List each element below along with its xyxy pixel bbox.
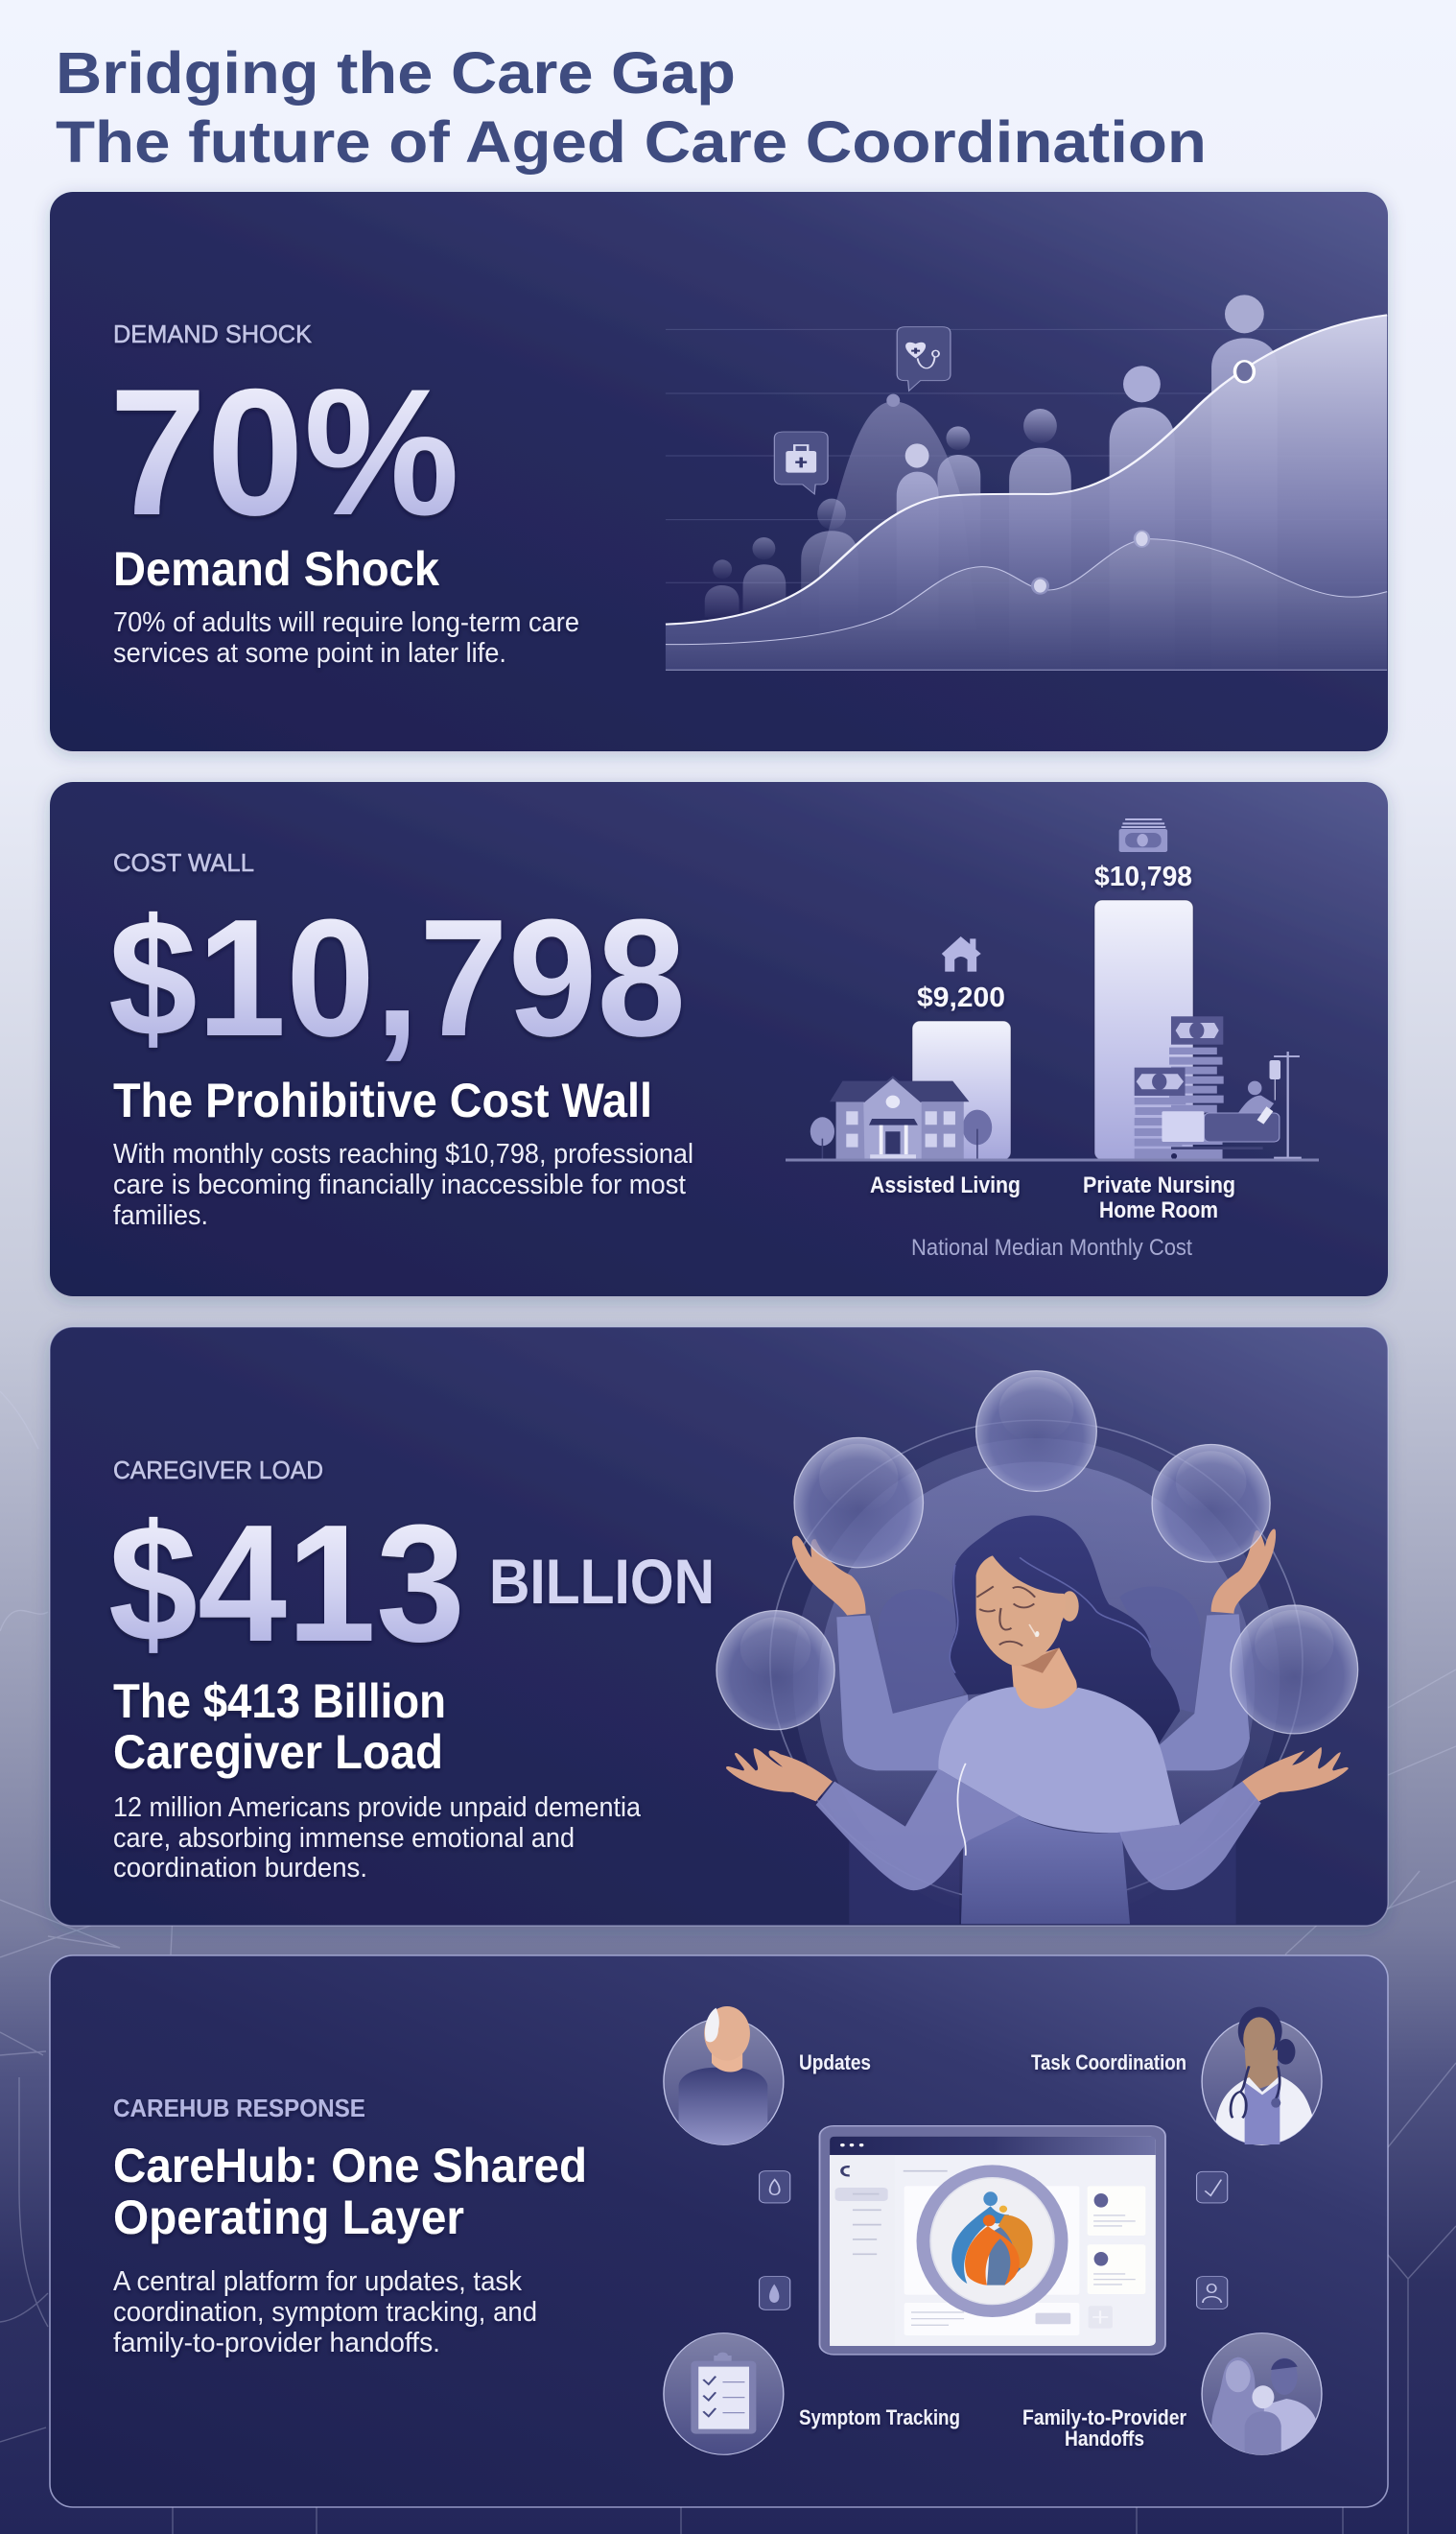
text block: cost wall: With monthly costs reaching $10,798, professional <box>113 1139 693 1170</box>
decorative network lines <box>0 1391 1456 2534</box>
text block: demand shock: 70% of adults will require long-term care <box>113 607 579 638</box>
text block: cost wall: The Prohibitive Cost Wall <box>113 1074 652 1127</box>
text block: cost wall: families. <box>113 1200 208 1231</box>
halo rings <box>770 1420 1303 1922</box>
text block: carehub response: coordination, symptom tracking, and <box>113 2297 537 2328</box>
bar: assisted living <box>912 1021 1011 1160</box>
text block: carehub response: Operating Layer <box>113 2191 464 2244</box>
text block: caregiver load <box>108 1456 715 1883</box>
hub labels: Symptom Tracking <box>799 2405 960 2429</box>
bar labels: Home Room <box>1099 1197 1218 1223</box>
avatar: family-to-provider handoffs (family) <box>1202 2333 1322 2456</box>
connector chips <box>760 2171 1228 2309</box>
panel: caregiver load <box>50 1327 1388 1926</box>
card background <box>50 1955 1388 2507</box>
hub labels: Handoffs <box>1065 2427 1144 2451</box>
illustration: assisted living building <box>810 1078 992 1159</box>
spheres <box>716 1371 1358 1734</box>
title: Bridging the Care Gap <box>56 40 736 106</box>
avatar: symptom tracking (clipboard) <box>664 2333 784 2454</box>
illustration: money stacks and care bed <box>1135 1016 1302 1159</box>
value labels: $9,200 <box>917 983 1005 1013</box>
text block: caregiver load: coordination burdens. <box>113 1853 367 1883</box>
text block: demand shock <box>109 320 579 669</box>
lowered arms <box>816 1768 1261 1890</box>
text block: demand shock: Demand Shock <box>113 542 439 596</box>
text block: cost wall: COST WALL <box>113 848 254 877</box>
panel: cost wall <box>50 782 1388 1296</box>
text block: caregiver load: care, absorbing immense emotional and <box>113 1823 575 1854</box>
text block: cost wall: care is becoming financially inaccessible for most <box>113 1170 686 1200</box>
raised arms <box>836 1614 1250 1770</box>
text block: carehub response: CareHub: One Shared <box>113 2139 587 2192</box>
panel: demand shock <box>50 192 1388 751</box>
title <box>56 40 1207 175</box>
text block: carehub response <box>113 2094 587 2358</box>
hands <box>726 1529 1349 1801</box>
text block: demand shock: 70% <box>109 351 459 553</box>
bar chart <box>786 819 1319 1261</box>
text block: caregiver load: Caregiver Load <box>113 1725 443 1779</box>
text block: cost wall <box>108 848 693 1231</box>
ghost arms <box>849 1586 1236 1924</box>
icon: CareHub logo figures <box>951 2191 1033 2285</box>
bar: private nursing home room <box>1094 900 1193 1160</box>
text block: cost wall: $10,798 <box>108 884 686 1071</box>
icon: heart stethoscope bubble <box>897 327 951 391</box>
text block: carehub response: family-to-provider handoffs. <box>113 2328 440 2358</box>
chart markers <box>886 361 1254 594</box>
hub labels: Family-to-Provider <box>1022 2405 1186 2429</box>
text block: caregiver load: 12 million Americans provide unpaid dementia <box>113 1792 642 1823</box>
central tablet dashboard with logo <box>819 2126 1165 2355</box>
torso <box>938 1687 1180 1833</box>
hub labels: Task Coordination <box>1031 2050 1186 2074</box>
text block: caregiver load: BILLION <box>489 1546 715 1617</box>
text block: caregiver load: The $413 Billion <box>113 1674 446 1728</box>
hub labels: Updates <box>799 2050 871 2074</box>
bar labels <box>870 1172 1235 1223</box>
illustration: overwhelmed caregiver juggling spheres <box>716 1371 1358 1924</box>
avatar: updates (older man) <box>664 2006 784 2146</box>
hub diagram <box>664 2006 1322 2456</box>
bar labels: Private Nursing <box>1083 1172 1235 1198</box>
text block: caregiver load: CAREGIVER LOAD <box>113 1456 323 1484</box>
card background <box>50 782 1388 1296</box>
avatar: task coordination (doctor) <box>1202 2007 1322 2146</box>
text block: carehub response: CAREHUB RESPONSE <box>113 2094 365 2122</box>
text block: carehub response: A central platform for updates, task <box>113 2266 522 2297</box>
text block: demand shock: services at some point in later life. <box>113 638 506 669</box>
baseline <box>786 1159 1319 1161</box>
title: The future of Aged Care Coordination <box>56 109 1207 175</box>
hair <box>950 1515 1180 1743</box>
icon: medical kit bubble <box>774 432 828 494</box>
face and neck <box>976 1555 1079 1710</box>
bar labels: Assisted Living <box>870 1172 1021 1198</box>
card background <box>50 1327 1388 1926</box>
text block: demand shock: DEMAND SHOCK <box>113 320 313 348</box>
panel: carehub response <box>50 1955 1388 2507</box>
value labels <box>917 862 1192 1013</box>
value labels: $10,798 <box>1094 862 1192 892</box>
icon: house <box>942 936 981 972</box>
card background <box>50 192 1388 751</box>
hub labels <box>799 2050 1186 2451</box>
text block: caregiver load: $413 <box>108 1489 465 1676</box>
area chart with people silhouettes <box>666 295 1387 670</box>
chart caption: National Median Monthly Cost <box>911 1235 1192 1261</box>
icon: money stack <box>1119 819 1167 852</box>
